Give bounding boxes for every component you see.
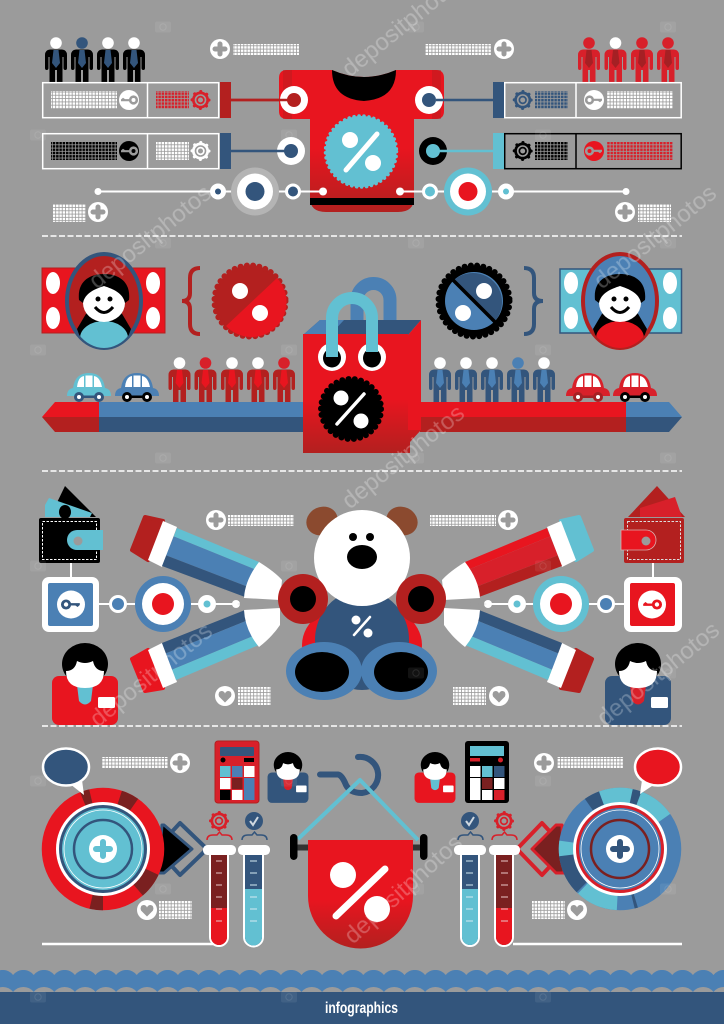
section: price t-shirt [43, 37, 681, 222]
calculator: red [215, 741, 259, 803]
label: plus top right [425, 39, 514, 59]
label: plus top left [210, 39, 299, 59]
watermark text: depositphotos [339, 829, 468, 949]
table row: lower left [43, 133, 231, 169]
bear foot: left [286, 642, 362, 700]
section: shopping bag [42, 254, 682, 453]
test tube: red left [203, 812, 236, 946]
agent small: navy [268, 752, 308, 803]
label: heart left [137, 900, 192, 920]
conveyor arrow bar [42, 402, 682, 432]
chevrons: left [156, 823, 207, 875]
table row: top left [43, 82, 294, 118]
section: calculators and test tubes [31, 741, 696, 949]
magnet: left [132, 517, 282, 691]
watermark text: depositphotos [589, 180, 722, 295]
magnet: right [442, 517, 592, 691]
calculator: black [465, 741, 509, 803]
timeline: right [396, 168, 630, 216]
portrait banknote: right [560, 254, 682, 355]
cars: right [566, 373, 657, 402]
people row: red [168, 357, 295, 402]
bear joint: right [396, 574, 487, 624]
bear joint: left [237, 574, 328, 624]
label: plus bottom right [615, 202, 671, 222]
eyelets [318, 343, 386, 371]
percent gear: black [438, 266, 510, 336]
belly percent [352, 616, 372, 638]
watermark text: depositphotos [85, 618, 218, 733]
key node: left [42, 563, 240, 632]
test tube: red right [489, 812, 520, 946]
disc: right [544, 773, 696, 925]
teddy bear [237, 502, 487, 700]
test tube: blue left [238, 812, 270, 946]
footer title: infographics [325, 1000, 398, 1017]
table row: top right [493, 82, 681, 118]
speech bubble: right [635, 748, 681, 794]
label: heart left [215, 686, 271, 706]
portrait banknote: left [42, 254, 165, 355]
label: plus left [102, 753, 190, 773]
people group: red [578, 37, 679, 82]
percent badge [326, 116, 396, 187]
wallet: black [39, 486, 103, 563]
people row: blue [429, 357, 555, 402]
label: heart right [453, 686, 509, 706]
connector nodes: left [231, 86, 308, 165]
label: heart right [532, 900, 587, 920]
label: plus right [534, 753, 623, 773]
bear foot: right [361, 642, 437, 700]
agent: navy [605, 643, 671, 725]
test tube: blue right [454, 812, 486, 946]
footer wave band [0, 970, 724, 1024]
watermark text: depositphotos [84, 180, 217, 295]
hanger hook [320, 757, 378, 793]
base lines [42, 943, 682, 945]
percent gear: red [214, 266, 287, 337]
speech bubble: left [43, 748, 89, 795]
people group: black and navy [45, 37, 145, 82]
percent banner [290, 834, 428, 949]
agent small: red [415, 752, 455, 803]
chevrons: right [517, 823, 566, 875]
agent: red [52, 643, 118, 725]
hanger wires [298, 780, 418, 840]
key node: right [484, 563, 682, 632]
bag handle [332, 298, 372, 357]
wallet: red [621, 486, 685, 563]
label: plus right [430, 510, 518, 530]
brace: left [182, 268, 200, 334]
shopping bag [303, 284, 421, 453]
cars: left [67, 373, 159, 402]
t-shirt [279, 70, 444, 212]
brace: right [524, 268, 543, 334]
connector nodes: right [415, 86, 493, 165]
watermark text: depositphotos [592, 617, 724, 732]
disc: left [31, 777, 175, 921]
section: teddy bear [39, 486, 685, 725]
percent gear on bag [321, 379, 381, 439]
table row: lower right [493, 133, 681, 169]
timeline: left [94, 168, 327, 216]
label: plus left [206, 510, 294, 530]
label: plus bottom left [53, 202, 108, 222]
watermark text: depositphotos [337, 400, 470, 515]
